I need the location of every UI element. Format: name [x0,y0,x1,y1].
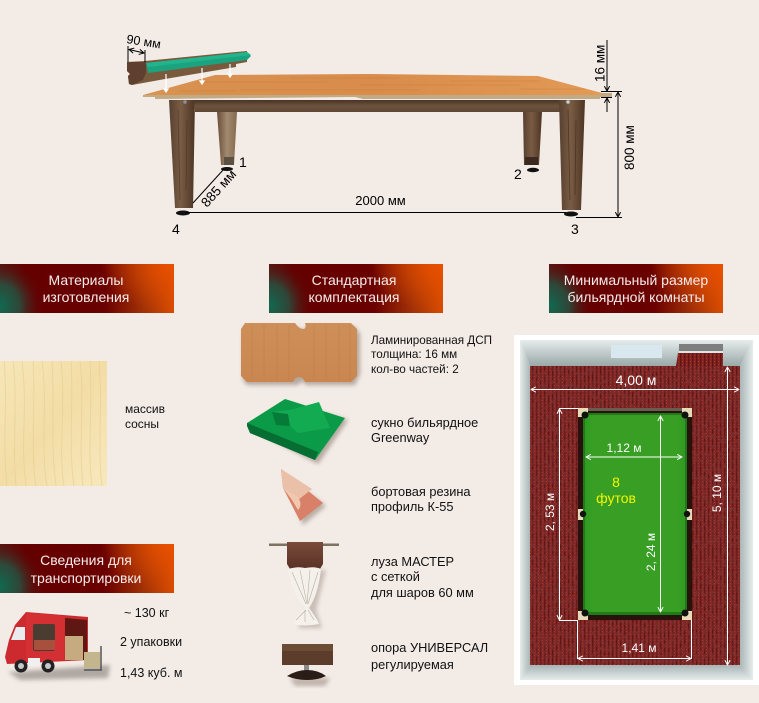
dimension: 16 мм: 16 мм [592,45,608,82]
text: pocket [371,554,474,600]
dimension: 1,41 м [578,620,692,659]
dimension: 800 мм: 800 мм [622,125,637,170]
text: volume: 1,43 куб. м [120,666,182,680]
icon: laminated board [241,323,360,385]
table top [143,74,612,99]
room walls [514,335,759,685]
carpet floor [530,353,740,665]
dimension: 90 мм: 90 мм [126,32,162,51]
door [679,344,723,353]
dimension: 2,24 м: 2, 24 м [644,533,658,571]
icon: cushion rubber [281,469,326,525]
text: pocket: с сеткой [371,569,420,584]
dimension: 885 мм: 885 мм [198,167,239,210]
panel: kit items [241,323,492,686]
table rail with green cushion [127,51,251,85]
heading: standard kit: Стандартная [312,272,396,288]
fitting arrows [164,64,232,92]
text: rubber: бортовая резина [371,484,471,499]
table diagram [126,32,637,237]
dimension: 2,53 м: 2, 53 м [543,493,557,531]
text: laminated board: толщина: 16 мм [371,348,457,361]
panel: transport [5,606,182,680]
table size label [596,474,636,506]
panel: materials [0,361,165,486]
leg number 4: 4 [172,221,180,237]
text: laminated board [371,334,492,376]
table size label: футов [596,490,636,506]
front right leg [559,100,585,216]
front left leg [169,100,195,216]
dimension: 1,41 м: 1,41 м [622,641,656,655]
heading: standard kit: комплектация [309,289,399,305]
icon: adjustable support [282,644,333,686]
text: rubber [371,484,471,514]
text: support: регулируемая [371,657,454,672]
text: rubber: профиль К-55 [371,499,453,514]
icon: pocket [269,542,339,628]
text: pocket: луза МАСТЕР [371,554,454,569]
dimension: 1,12 м [586,441,682,457]
heading: materials: Материалы [49,272,123,288]
leg number 2: 2 [514,166,522,182]
panel: room plan [514,335,759,685]
back right leg [523,112,542,172]
pine label: сосны [125,417,159,431]
dimension: 4,00 м: 4,00 м [616,372,656,388]
table apron [195,100,560,112]
dimension: 90 мм [126,32,162,62]
text: weight: ~ 130 кг [124,606,170,620]
pine label: массив [125,402,165,416]
billiard table plan [578,408,692,620]
dimension: 1,12 м: 1,12 м [607,441,641,455]
icon: red delivery truck [5,612,110,680]
text: cloth: сукно бильярдное [371,415,478,430]
dimension: 5,10 м: 5, 10 м [710,474,724,512]
text: pocket: для шаров 60 мм [371,585,474,600]
heading: materials [0,264,174,313]
text: support [371,640,488,672]
heading: standard kit [269,264,443,313]
pine label [125,402,165,431]
text: laminated board: кол-во частей: 2 [371,363,459,376]
heading: minimum room size [549,264,723,313]
heading: transport: транспортировки [31,570,141,586]
heading: minimum room size: бильярдной комнаты [567,289,705,305]
heading: transport [0,544,174,593]
back left leg [217,112,237,171]
window [611,345,662,358]
text: cloth: Greenway [371,430,430,445]
text: cloth [371,415,478,445]
heading: transport: Сведения для [40,552,132,568]
text: packages: 2 упаковки [120,635,182,649]
heading: materials: изготовления [43,289,129,305]
leg number 1: 1 [239,154,247,170]
table size label: 8 [612,474,620,490]
dimension: 2000 мм: 2000 мм [355,193,406,208]
dimension: 800 мм [576,92,637,218]
dimension: 16 мм [592,40,622,112]
dimension: 2,53 м [543,408,578,620]
heading: minimum room size: Минимальный размер [564,272,708,288]
text: support: опора УНИВЕРСАЛ [371,640,488,655]
leg number 3: 3 [571,221,579,237]
text: laminated board: Ламинированная ДСП [371,334,492,347]
icon: green cloth [247,399,348,464]
pine wood sample [0,361,107,486]
